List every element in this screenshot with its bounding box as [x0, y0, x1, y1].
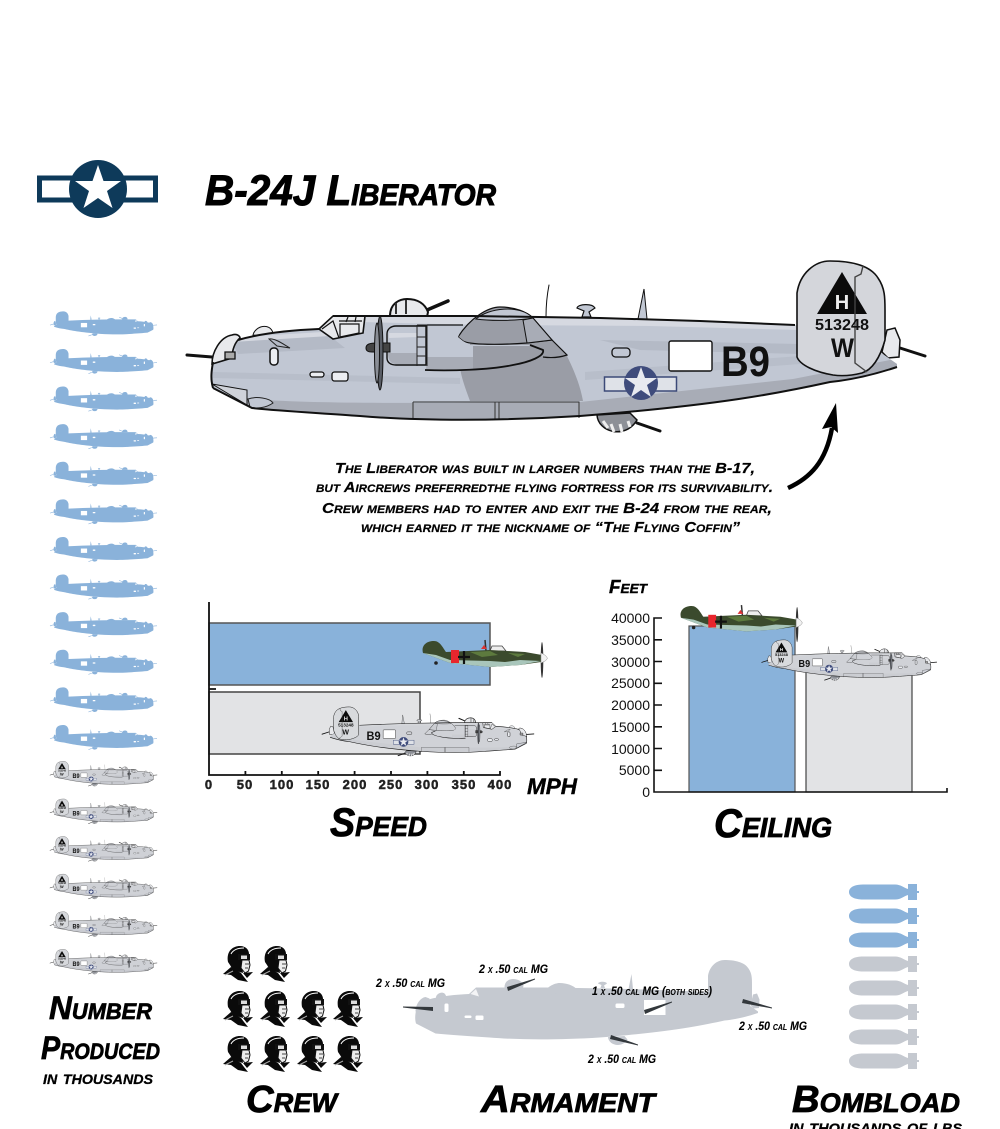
heading: number produced: Number [49, 990, 152, 1026]
text block: aircraft description: which earned it the nickname of “The Flying Coffin” [361, 519, 741, 536]
heading: armament: Armament [480, 1079, 658, 1121]
text block: aircraft description: The Liberator was built in larger numbers than the B-17, [335, 460, 755, 477]
unit label: feet: Feet [609, 577, 648, 597]
icon: B-24 [322, 707, 534, 756]
axis labels: 0 [205, 777, 213, 792]
bar: B-24 ceiling [806, 672, 912, 792]
labels: gun positions: 2 x .50 cal MG [478, 962, 548, 976]
bar: fighter ceiling [689, 626, 795, 792]
text block: aircraft description [316, 460, 773, 536]
guns [403, 978, 772, 1046]
axis labels: 350 [452, 777, 476, 792]
silhouette: B-24 [415, 960, 760, 1045]
icon: fighter [423, 640, 547, 678]
axis labels: 400 [488, 777, 512, 792]
illustration: B-24J side view: H [835, 292, 849, 314]
axis labels: 5000 [619, 762, 650, 778]
chart: ceiling [609, 577, 947, 846]
panel: crew [223, 946, 363, 1121]
panel: bombload [789, 884, 963, 1129]
heading: bombload: Bombload [792, 1079, 960, 1121]
heading: ceiling: Ceiling [714, 802, 832, 846]
labels: gun positions: 2 x .50 cal MG [738, 1019, 807, 1033]
icons: grey bombs [849, 956, 919, 1069]
chart: speed [205, 602, 578, 845]
axis labels: 150 [306, 777, 330, 792]
illustration: B-24J side view: W [831, 333, 854, 363]
labels: gun positions: 1 x .50 cal MG (both sides) [592, 984, 712, 998]
bar: B-24 speed [209, 692, 420, 754]
axis labels [205, 777, 512, 792]
labels: gun positions: 2 x .50 cal MG [587, 1052, 656, 1066]
axis labels: 250 [379, 777, 403, 792]
heading: crew: Crew [246, 1079, 340, 1121]
heading: speed: Speed [330, 801, 427, 845]
axis labels: 35000 [611, 632, 650, 648]
icon: fighter [681, 605, 802, 642]
labels: gun positions: 2 x .50 cal MG [375, 976, 445, 990]
heading: number produced: in thousands [43, 1067, 154, 1089]
axis labels: 300 [415, 777, 439, 792]
axis labels: 0 [642, 784, 650, 800]
unit label: MPH: MPH [527, 774, 578, 799]
heading: number produced [41, 990, 160, 1089]
insignia: US star and bar [40, 160, 156, 218]
axis labels: 25000 [611, 675, 650, 691]
bar: fighter speed [209, 623, 490, 685]
icons: twelve blue aircraft silhouettes [50, 311, 157, 750]
axis labels: 15000 [611, 719, 650, 735]
heading: number produced: Produced [41, 1030, 160, 1066]
text block: aircraft description: Crew members had to enter and exit the B-24 from the rear, [322, 500, 772, 517]
icon: B-24 [762, 640, 937, 680]
icons: six grey aircraft [50, 761, 157, 974]
title: B-24J Liberator [205, 167, 496, 215]
axis labels: 200 [343, 777, 367, 792]
axes [654, 618, 947, 792]
axis labels: 40000 [611, 610, 650, 626]
axis labels: 50 [237, 777, 253, 792]
arrow: pointing to the rear of the aircraft [788, 403, 838, 488]
labels: gun positions [375, 962, 807, 1066]
illustration: B-24J side view [187, 261, 925, 432]
icons: blue bombs [849, 884, 919, 948]
axis labels: 10000 [611, 741, 650, 757]
axes [209, 602, 500, 775]
axis labels [611, 610, 650, 800]
text block: aircraft description: but Aircrews preferredthe flying fortress for its survivability. [316, 479, 773, 496]
icons: ten crew members [223, 946, 363, 1072]
illustration: B-24J side view: 513248 [815, 317, 869, 334]
axis labels: 100 [270, 777, 294, 792]
axis labels: 30000 [611, 654, 650, 670]
axis labels: 20000 [611, 697, 650, 713]
panel: number produced [41, 311, 160, 1089]
illustration: B-24J side view: B9 [721, 338, 770, 386]
panel: armament [375, 960, 807, 1121]
